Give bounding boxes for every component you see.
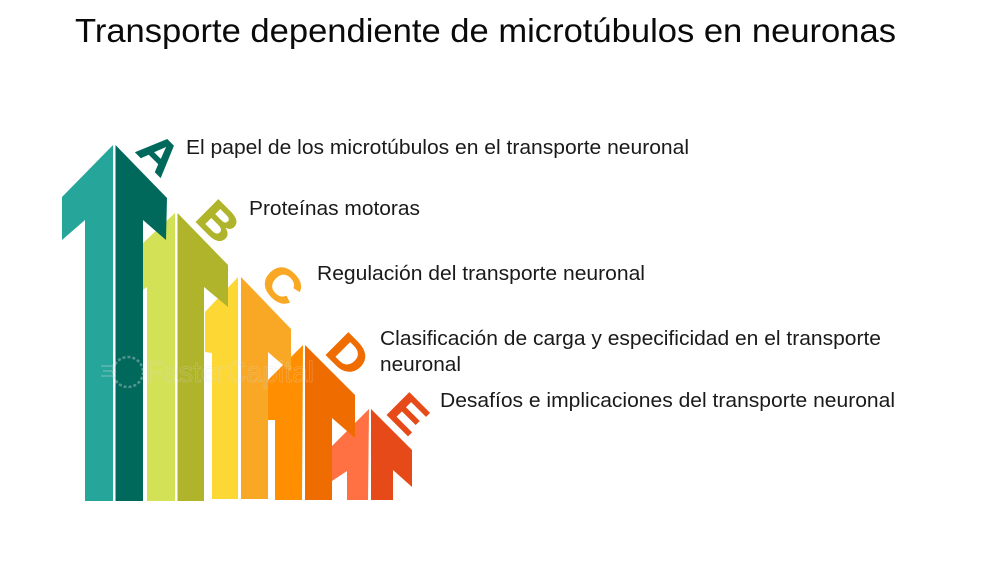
- arrow C: [205, 277, 291, 499]
- arrow B: [143, 213, 228, 501]
- letter A: A: [127, 122, 191, 186]
- label D: Clasificación de carga y especificidad en el transporte: [380, 328, 881, 350]
- label D: [380, 328, 881, 376]
- letter E: E: [377, 383, 439, 445]
- arrow chart: [62, 145, 412, 501]
- arrow D: [268, 345, 355, 500]
- letter C: C: [250, 253, 314, 317]
- label A: El papel de los microtúbulos en el transporte neuronal: [186, 137, 689, 159]
- letter D: D: [316, 323, 380, 387]
- label D: neuronal: [380, 354, 461, 376]
- watermark: FasterCapital: [146, 356, 314, 389]
- label B: Proteínas motoras: [249, 198, 420, 220]
- arrow A: [62, 145, 167, 501]
- arrow E: [332, 409, 412, 500]
- label C: Regulación del transporte neuronal: [317, 263, 645, 285]
- title: Transporte dependiente de microtúbulos en neuronas: [75, 12, 896, 49]
- letter B: B: [186, 190, 250, 254]
- label E: Desafíos e implicaciones del transporte neuronal: [440, 390, 895, 412]
